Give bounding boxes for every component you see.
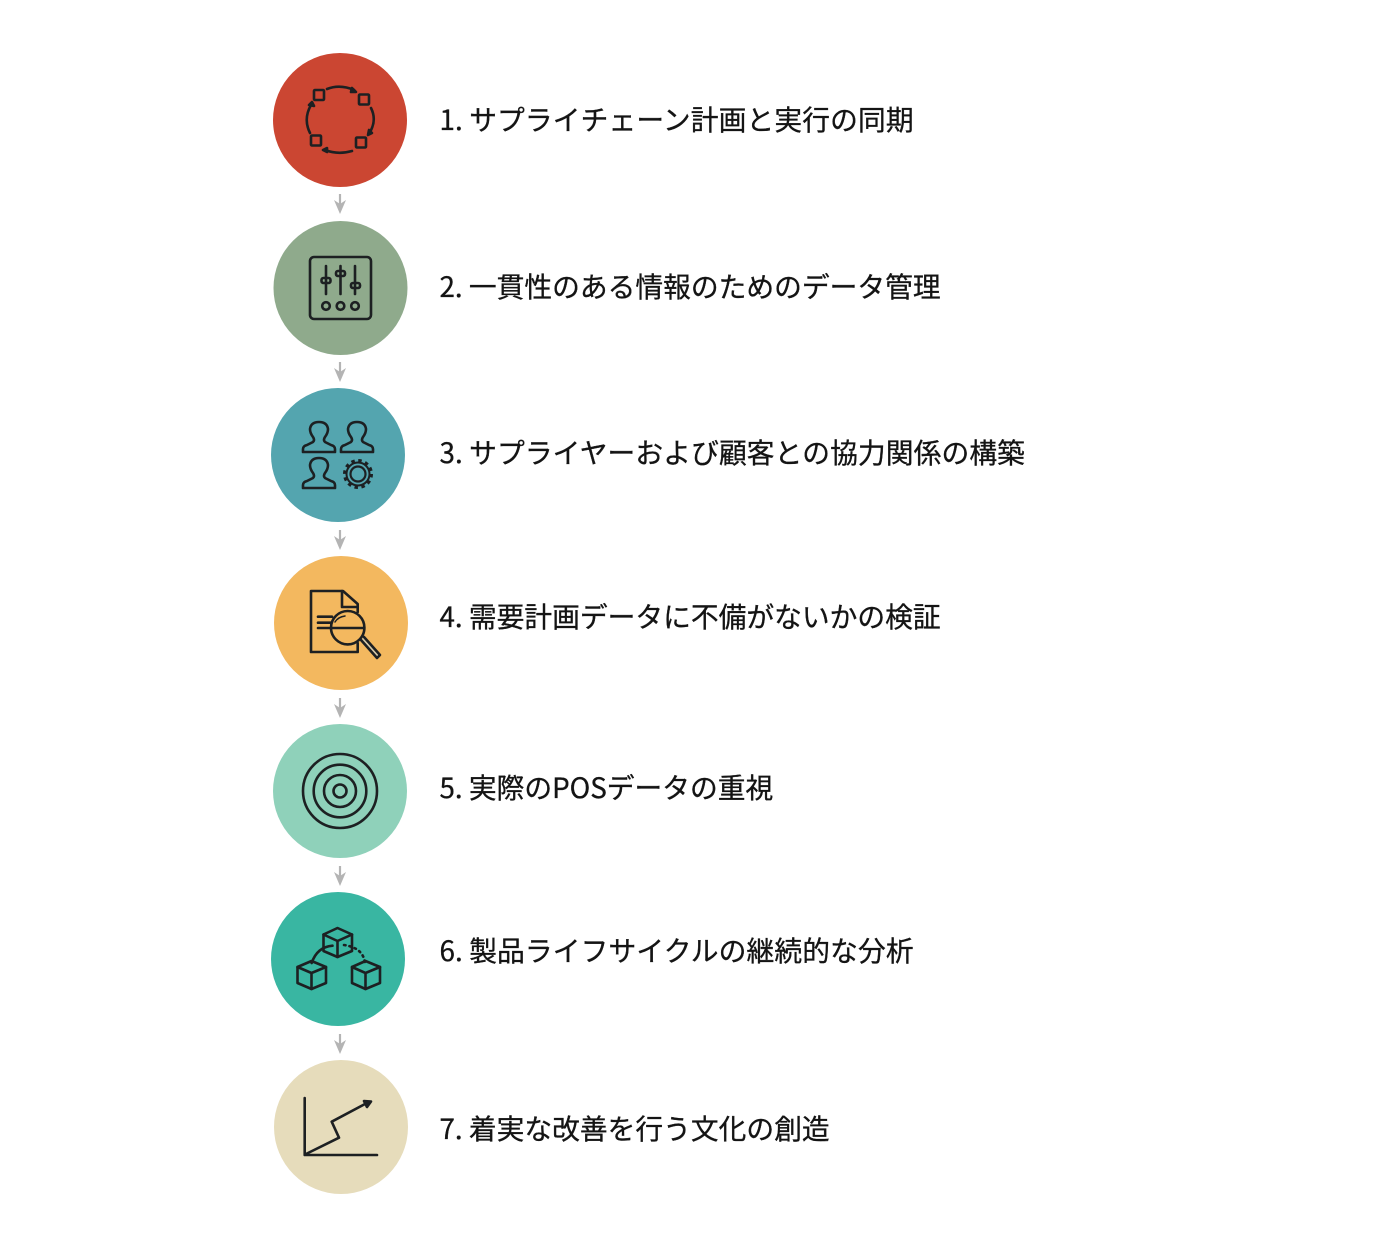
circle: red [273,53,407,187]
circle: beige [274,1060,408,1194]
icon: concentric target [303,754,377,828]
arrow 2 [334,362,346,382]
icon: mixer sliders [310,257,371,319]
circle: mint [273,724,407,858]
icon: document and magnifier [311,591,380,658]
label 5: 5. 実際のPOSデータの重視 [440,766,773,806]
label 7: 7. 着実な改善を行う文化の創造 [440,1107,830,1147]
circle: green teal [271,892,405,1026]
label 3: 3. サプライヤーおよび顧客との協力関係の構築 [440,431,1025,471]
label 4: 4. 需要計画データに不備がないかの検証 [440,595,941,635]
label 6: 6. 製品ライフサイクルの継続的な分析 [440,929,914,969]
arrow 6 [334,1034,346,1054]
arrow 5 [334,866,346,886]
step 5: POS data focus [273,724,773,858]
step 4: validate demand plan data [274,556,941,690]
step 2: master data management [274,221,941,355]
step 7: continuous improvement culture [274,1060,830,1194]
circle: amber [274,556,408,690]
icon: rising line chart [305,1098,377,1155]
step 6: product lifecycle analysis [271,892,914,1026]
arrow 1 [334,194,346,214]
circle: teal blue [271,388,405,522]
arrow 3 [334,530,346,550]
circle: sage green [274,221,408,355]
icon: cycle of four squares [307,87,374,153]
label 2: 2. 一貫性のある情報のためのデータ管理 [440,265,941,305]
label 1: 1. サプライチェーン計画と実行の同期 [440,98,914,138]
step 1: synchronise planning and execution [273,53,914,187]
step 3: supplier and customer collaboration [271,388,1025,522]
arrow 4 [334,698,346,718]
icon: three linked cubes [298,928,380,989]
icon: people and gear [303,422,373,488]
